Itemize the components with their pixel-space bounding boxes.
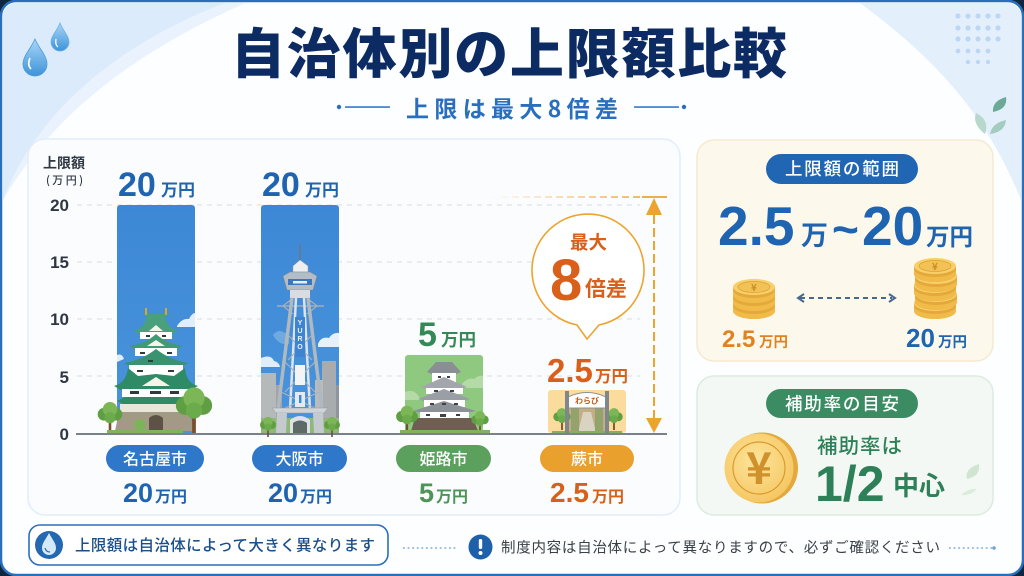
value labels: 万円: [595, 363, 628, 387]
axis title: (万円): [46, 172, 83, 188]
city values: 万円: [436, 483, 468, 507]
icon: large coin stack: [914, 258, 957, 319]
city values: 2.5: [550, 477, 589, 508]
city labels: 蕨市: [571, 446, 603, 470]
range value: 万: [801, 214, 828, 253]
panel: 補助率の目安: [697, 376, 993, 515]
subtitle: 上限は最大8倍差: [406, 90, 618, 124]
icon: water drops: [23, 23, 69, 76]
icon: leaf: [961, 464, 979, 495]
value labels: 万円: [305, 176, 339, 201]
pill heading: 補助率の目安: [785, 391, 899, 416]
value labels: 20: [262, 166, 300, 204]
dotted line right: [949, 546, 996, 550]
icon: leaves: [975, 97, 1006, 134]
bar: 姫路市: [396, 355, 490, 433]
city values: 5: [419, 478, 434, 508]
castle: Nagoya: [98, 308, 212, 433]
coin labels: 20: [906, 323, 935, 353]
gridlines: [77, 205, 640, 376]
city values: 万円: [155, 483, 187, 507]
icon: yen coin: ¥: [746, 433, 772, 497]
pill heading: 上限額の範囲: [785, 156, 899, 181]
icon: exclamation: [468, 534, 492, 560]
coin labels: [722, 323, 967, 353]
range value: 20: [862, 195, 923, 257]
city labels: 姫路市: [419, 446, 468, 470]
title: 自治体別の上限額比較: [231, 10, 787, 89]
city values: 20: [123, 478, 153, 508]
text: rate: 1/2: [815, 456, 885, 512]
arrow: range: [490, 197, 667, 433]
axis numbers: 0: [60, 425, 69, 444]
decorative dot grid: [955, 13, 1001, 64]
city labels: 大阪市: [275, 446, 324, 470]
value labels: 5: [418, 316, 437, 354]
gate: Warabi: わらび: [575, 396, 599, 406]
bar: 蕨市: [548, 390, 626, 433]
value labels: 2.5: [547, 352, 593, 389]
value labels: 万円: [161, 176, 195, 201]
tower: Tsutenkaku: [260, 244, 340, 437]
tower: Tsutenkaku: Y: [298, 320, 303, 327]
tower: Tsutenkaku: O: [297, 344, 303, 351]
city values: 20: [268, 478, 298, 508]
tower: Tsutenkaku: R: [297, 336, 303, 343]
coin labels: 万円: [759, 331, 788, 352]
text: rate: [815, 429, 945, 512]
axis title: [43, 153, 85, 188]
pill heading: [766, 389, 918, 418]
range value: [718, 195, 973, 257]
panel: 上限額の範囲: [697, 140, 993, 361]
icon: large coin stack: ¥: [932, 258, 938, 273]
dotted line left: [403, 547, 458, 549]
city values: 万円: [592, 483, 624, 507]
coin labels: 万円: [938, 331, 967, 352]
notice text: 制度内容は自治体によって異なりますので、必ずご確認ください: [501, 536, 940, 558]
callout: 最大8倍差: 倍差: [585, 273, 627, 303]
axis numbers: 10: [50, 310, 69, 329]
icon: drop badge: [35, 531, 63, 559]
arrow: between stacks: [798, 294, 895, 302]
callout: 上限額 note: [29, 525, 388, 565]
callout: 最大8倍差: 最大: [570, 229, 607, 255]
icon: yen coin: [724, 432, 798, 504]
icon: small coin stack: ¥: [751, 279, 757, 294]
text: rate: 補助率は: [817, 429, 902, 459]
icon: small coin stack: [733, 279, 775, 319]
axis numbers: 5: [60, 368, 69, 387]
axis numbers: [50, 196, 69, 444]
axis line: [76, 433, 667, 435]
value labels: 20: [118, 166, 156, 204]
axis title: 上限額: [43, 153, 85, 173]
city labels: [106, 445, 634, 472]
coin labels: 2.5: [722, 326, 755, 353]
range value: 万円: [926, 218, 973, 252]
bar: 大阪市: [260, 205, 340, 437]
axis numbers: 15: [50, 253, 69, 272]
callout: 最大8倍差: 8: [550, 248, 582, 313]
callout: 最大8倍差: [532, 214, 644, 339]
panel: chart: [28, 139, 680, 515]
castle: Himeji: [396, 362, 490, 433]
range value: ~: [832, 203, 859, 255]
city values: [123, 477, 624, 508]
bar: 名古屋市: [98, 205, 212, 433]
value labels: 万円: [441, 327, 476, 352]
axis numbers: 20: [50, 196, 69, 215]
text: rate: 中心: [893, 466, 945, 503]
pill heading: [766, 154, 918, 184]
city labels: 名古屋市: [123, 446, 187, 470]
city buildings: [261, 361, 339, 433]
city values: 万円: [300, 483, 332, 507]
range value: 2.5: [718, 195, 794, 257]
value labels: [118, 166, 628, 389]
tower: Tsutenkaku: U: [297, 328, 303, 335]
callout: 上限額 note: 上限額は自治体によって大きく異なります: [75, 534, 375, 556]
subtitle: [337, 90, 686, 124]
